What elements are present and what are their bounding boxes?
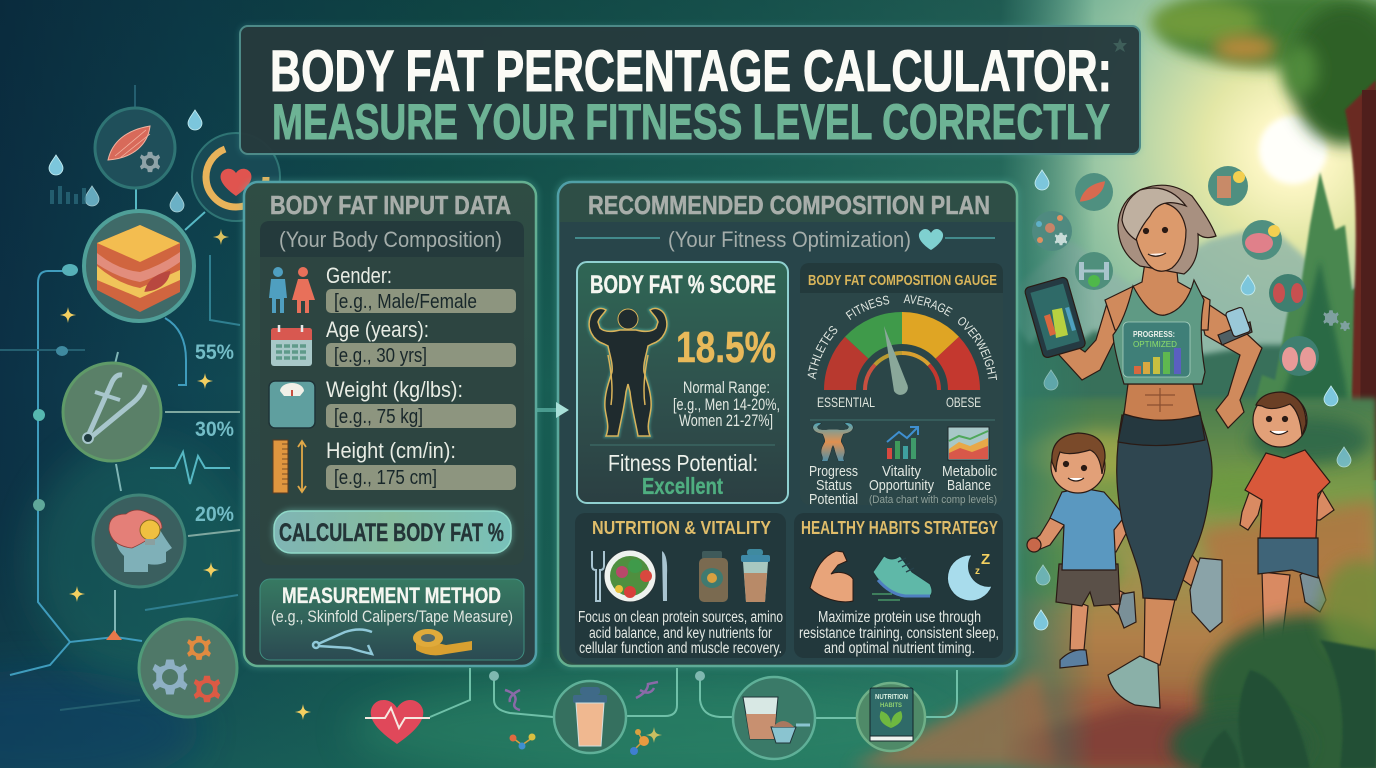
right arm — [1196, 296, 1262, 428]
back leg and shoe — [1176, 540, 1206, 592]
subheading: (Your Fitness Optimization) — [668, 227, 911, 252]
side percentages — [195, 341, 234, 526]
hair back — [1118, 185, 1216, 274]
label: progress status potential: Status — [816, 477, 852, 494]
label: progress status potential: Potential — [809, 491, 858, 508]
calculate button: CALCULATE BODY FAT % — [279, 519, 504, 547]
icon: tape measure — [413, 629, 472, 655]
nutrition text — [578, 609, 783, 657]
icon: brain and lightbulb — [93, 495, 185, 587]
shirt progress panel — [1123, 322, 1190, 377]
note: data chart: (Data chart with comp levels) — [869, 494, 997, 506]
phone — [1024, 276, 1086, 359]
field: age — [326, 317, 516, 367]
field: weight: [e.g., 75 kg] — [334, 406, 423, 428]
shirt progress panel: PROGRESS: — [1133, 330, 1175, 339]
leggings — [1117, 415, 1212, 600]
icon: ruler and height arrow — [273, 440, 306, 493]
sun disc — [1259, 116, 1327, 184]
label: metabolic balance: Balance — [947, 477, 991, 494]
pine tree — [1256, 172, 1356, 399]
habits text: Maximize protein use through — [818, 609, 981, 626]
gauge arc labels: ATHLETES — [808, 326, 838, 380]
icon: nutrition book bubble: NUTRITION — [875, 694, 908, 701]
armband — [1218, 307, 1252, 345]
front lower leg — [1144, 595, 1176, 665]
panel: recommended composition plan — [554, 178, 1020, 670]
card: healthy habits strategy — [794, 513, 1003, 658]
left arm — [1050, 300, 1120, 380]
icon: protein shaker bubble — [554, 681, 626, 753]
card: nutrition and vitality — [575, 513, 786, 658]
icon: dumbbell bubble — [1075, 252, 1113, 290]
side percentages: 55% — [195, 341, 234, 364]
inner form area — [260, 221, 524, 565]
icon: gears — [139, 619, 237, 717]
measurement method card — [260, 579, 524, 660]
treeline — [1018, 328, 1282, 402]
illustration: boy in red shirt — [1240, 392, 1334, 640]
icon: weighing scale — [269, 381, 315, 428]
icon: supplement jar and shaker — [699, 549, 770, 602]
icon: moon with z letters: z — [975, 566, 980, 577]
panel: body fat input data — [239, 166, 1376, 768]
field: gender: [e.g., Male/Female — [334, 291, 477, 313]
icon: metabolic chart — [948, 427, 989, 460]
habits heading: HEALTHY HABITS STRATEGY — [801, 518, 998, 538]
side percentages: 20% — [195, 503, 234, 526]
fitness potential: Fitness Potential: — [608, 450, 758, 476]
bottom connector lines — [430, 668, 957, 718]
label: vitality opportunity: Vitality — [882, 463, 921, 480]
icon: caliper — [313, 630, 372, 654]
trunk — [1345, 80, 1376, 480]
waistband — [1118, 412, 1205, 446]
hand — [1044, 327, 1062, 345]
label: progress status potential: Progress — [809, 463, 858, 480]
icon: flexed bicep — [810, 551, 853, 602]
face — [1134, 202, 1186, 271]
icon: skinfold calipers — [63, 363, 161, 461]
icon: measuring cup and scoop bubble — [733, 677, 815, 759]
card: body fat score: Excellent — [642, 473, 723, 499]
panel heading: RECOMMENDED COMPOSITION PLAN — [588, 190, 990, 220]
label: vitality opportunity — [869, 463, 934, 494]
card: body fat score — [577, 262, 788, 503]
normal range: Women 21-27%] — [679, 411, 773, 430]
front shoe — [1108, 656, 1160, 708]
gauge arc labels: AVERAGE — [904, 294, 953, 316]
normal range: Normal Range: — [683, 378, 770, 397]
field: height: Height (cm/in): — [326, 438, 456, 463]
gauge chart: ESSENTIAL — [817, 394, 875, 410]
tree canopy top right — [1160, 0, 1376, 68]
field: height: [e.g., 175 cm] — [334, 467, 437, 489]
habits text: resistance training, consistent sleep, — [799, 625, 999, 642]
nutrition text: Focus on clean protein sources, amino — [578, 609, 783, 626]
side percentages: 30% — [195, 418, 234, 441]
normal range: [e.g., Men 14-20%, — [673, 395, 780, 414]
icon: progress body — [813, 423, 853, 461]
nutrition text: acid balance, and key nutrients for — [589, 625, 772, 642]
panel heading: BODY FAT INPUT DATA — [270, 190, 511, 220]
gauge arc labels: FITNESS — [846, 296, 890, 320]
foreground foliage — [1170, 560, 1376, 768]
gauge arc labels: OVERWEIGHT — [958, 317, 998, 380]
subheading: (Your Body Composition) — [279, 227, 502, 252]
gauge needle — [884, 326, 908, 395]
field: height — [326, 438, 516, 490]
icon: kidneys bubble — [1269, 274, 1307, 312]
icon: running shoe — [872, 556, 932, 600]
arrow between panels — [537, 402, 569, 418]
dna and molecule decorations — [505, 682, 662, 755]
habits text: and optimal nutrient timing. — [824, 640, 975, 657]
tank top — [1113, 280, 1205, 384]
icon: muscle and gear — [95, 108, 175, 188]
icon: shaker and bulb bubble — [1208, 166, 1248, 206]
ground — [1007, 394, 1376, 768]
gauge chart: OBESE — [946, 394, 981, 410]
icon: nutrition book bubble: HABITS — [880, 703, 902, 709]
icon: lungs bubble — [1279, 336, 1319, 376]
abdomen — [1124, 384, 1200, 420]
field: age: [e.g., 30 yrs] — [334, 345, 427, 367]
icon: muscle bubble — [1075, 173, 1113, 211]
icon: nutrition book bubble — [857, 683, 925, 751]
icon: fat tissue cross-section — [84, 211, 194, 321]
nutrition heading: NUTRITION & VITALITY — [592, 518, 771, 538]
sparkles and droplets left — [49, 110, 311, 720]
mountains — [1021, 228, 1355, 351]
card: body fat composition gauge — [800, 263, 1003, 508]
neck and shoulders — [1105, 262, 1210, 330]
measurement method card: MEASUREMENT METHOD — [282, 583, 501, 608]
score value: 18.5% — [676, 323, 776, 372]
gauge heading: BODY FAT COMPOSITION GAUGE — [808, 273, 997, 289]
icon: vitality rising bars — [887, 427, 918, 459]
icon: gears small — [1323, 310, 1350, 331]
field: gender — [326, 263, 516, 313]
icon: man and woman — [269, 267, 315, 313]
field: weight — [326, 377, 516, 428]
habits text — [799, 609, 999, 657]
gauge arc labels — [808, 294, 998, 380]
droplets — [1034, 170, 1351, 630]
muscular body figure — [589, 308, 667, 436]
icon: brain bubble — [1242, 220, 1282, 260]
icon: small star — [1113, 38, 1127, 52]
icon: calendar — [271, 325, 312, 366]
background scene: park with sun, trees and path — [1007, 0, 1376, 768]
icon: molecule bubble — [1032, 211, 1072, 251]
nutrition text: cellular function and muscle recovery. — [579, 640, 782, 657]
illustration: boy in blue shirt — [1027, 433, 1136, 668]
icon: moon with z letters — [947, 551, 992, 601]
icon: heart with pulse — [365, 700, 430, 744]
icon: plate with fork and knife — [592, 550, 667, 602]
heading line one: BODY FAT PERCENTAGE CALCULATOR: — [270, 39, 1112, 104]
title panel — [238, 24, 1142, 156]
card heading: BODY FAT % SCORE — [590, 271, 776, 299]
label: metabolic balance — [942, 463, 997, 494]
connection nodes — [33, 264, 122, 640]
icon: heart rate ring — [192, 133, 280, 221]
field: age: Age (years): — [326, 317, 429, 342]
gauge chart — [808, 294, 998, 410]
illustration: woman running with phone — [1024, 185, 1262, 708]
icon: heart — [919, 229, 943, 250]
label: vitality opportunity: Opportunity — [869, 477, 934, 494]
heading line two: MEASURE YOUR FITNESS LEVEL CORRECTLY — [272, 94, 1110, 150]
normal range — [673, 378, 780, 430]
label: metabolic balance: Metabolic — [942, 463, 997, 480]
left side circuit lines — [0, 85, 240, 710]
calculate button — [272, 509, 513, 555]
path shadows — [1048, 688, 1197, 768]
field: gender: Gender: — [326, 263, 392, 288]
floating health icon bubbles — [1032, 166, 1351, 630]
field: weight: Weight (kg/lbs): — [326, 377, 463, 402]
shirt progress panel: OPTIMIZED — [1133, 340, 1177, 349]
label: progress status potential — [809, 463, 858, 508]
measurement method card: (e.g., Skinfold Calipers/Tape Measure) — [271, 607, 513, 626]
icon: moon with z letters: Z — [981, 551, 990, 568]
